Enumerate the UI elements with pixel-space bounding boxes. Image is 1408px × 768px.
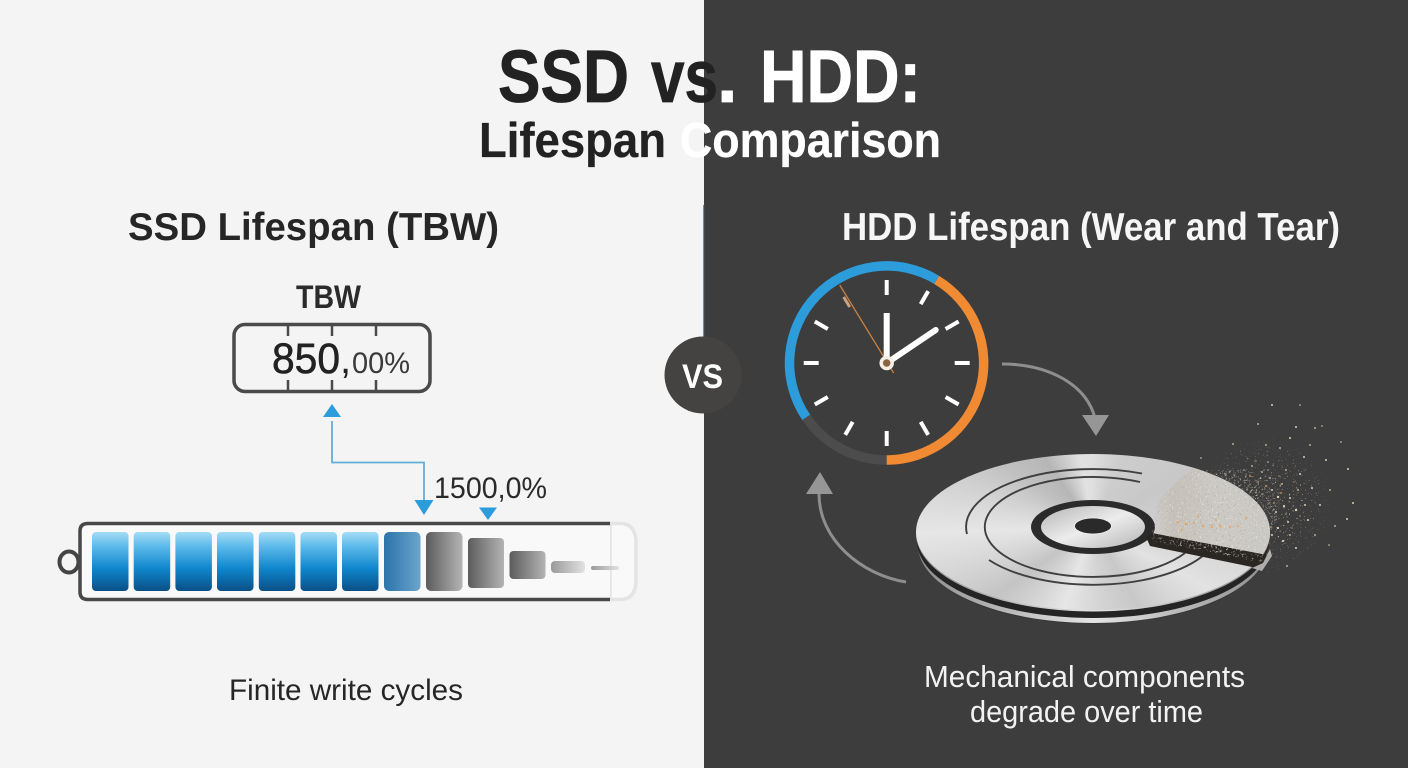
- VS badge: VS: [682, 358, 723, 396]
- TBW gauge: [234, 279, 430, 392]
- marker: 1500,0%: [434, 472, 547, 520]
- caption: HDD: [924, 659, 1245, 729]
- panel: HDD dark background: [704, 0, 1408, 768]
- title line 2 dark part: Lifespan: [479, 114, 666, 168]
- clock second hand: [840, 285, 894, 373]
- title line 1 dark part: SSD: [498, 35, 629, 118]
- orange dust streak: [1177, 515, 1247, 531]
- heading: HDD lifespan: HDD Lifespan (Wear and Tear): [842, 206, 1340, 249]
- platter top surface: [916, 454, 1270, 610]
- icon: clock: [790, 266, 984, 460]
- counter value: 00%: [352, 347, 410, 380]
- marker: 1500,0%: 1500,0%: [434, 472, 547, 505]
- bar ring: [60, 552, 78, 572]
- filled cells: [92, 532, 378, 591]
- transition cell: [384, 532, 420, 591]
- platter under layers: [923, 480, 1263, 624]
- dust speckle behind platter: [1208, 438, 1332, 572]
- heading: SSD lifespan: SSD Lifespan (TBW): [128, 206, 499, 249]
- arrow: from bar to TBW counter: [323, 404, 434, 515]
- panel: SSD light background: [0, 0, 704, 768]
- arrow: platter to clock: [806, 472, 906, 582]
- counter value: [272, 335, 410, 383]
- caption: HDD: Mechanical components: [924, 659, 1245, 694]
- TBW label: TBW: [296, 279, 362, 315]
- counter value: 850: [272, 335, 340, 383]
- dust particles on sector: [1151, 470, 1280, 562]
- clock progress ring: [790, 266, 984, 460]
- platter crack: [1146, 533, 1272, 571]
- title line 1 light part: HDD:: [760, 35, 921, 118]
- counter box: [234, 324, 430, 392]
- worn sector: [1157, 468, 1270, 554]
- title line 1 dark part: vs: [651, 35, 718, 118]
- clock tick marks: [804, 280, 970, 446]
- dust cloud: [1200, 404, 1354, 567]
- clock hands: [887, 313, 936, 363]
- platter grooves: [966, 469, 1204, 585]
- caption: HDD: degrade over time: [970, 694, 1203, 729]
- title line 1 dark part: [498, 35, 718, 118]
- clock hub: [881, 358, 892, 368]
- worn cells: [426, 532, 619, 591]
- icon: worn HDD platter: [916, 404, 1354, 624]
- VS badge: [664, 336, 742, 414]
- SSD wear bar: [60, 524, 636, 600]
- counter value: ,: [340, 338, 351, 382]
- title line 1 light part: .: [717, 35, 738, 118]
- title line 2 light part: Comparison: [680, 114, 941, 168]
- caption: SSD: Finite write cycles: [229, 674, 463, 707]
- title: [479, 35, 941, 168]
- bar outline: [80, 524, 636, 600]
- platter hub: [1031, 500, 1155, 554]
- arrow: clock to platter: [1002, 364, 1109, 436]
